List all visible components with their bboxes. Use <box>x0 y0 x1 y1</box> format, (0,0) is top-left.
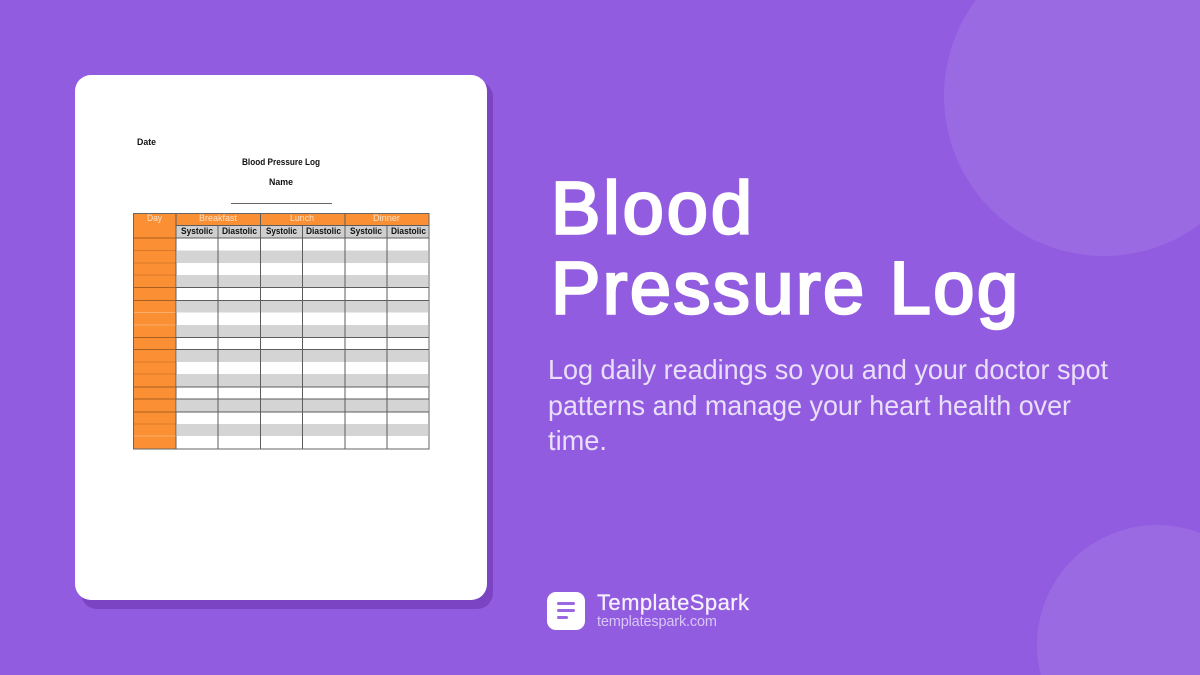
Day column <box>133 213 176 449</box>
description: Log daily readings so you and your doctor spot <box>548 354 1108 385</box>
systolic and diastolic labels: Diastolic <box>391 226 426 237</box>
log form header text <box>137 137 332 204</box>
systolic and diastolic labels: Diastolic <box>306 226 341 237</box>
log form header text: Blood Pressure Log <box>242 157 320 168</box>
systolic and diastolic labels <box>181 226 426 237</box>
log form header text: Name <box>269 177 293 188</box>
title: Pressure Log <box>551 246 1018 330</box>
shaded rows <box>177 250 428 436</box>
description: patterns and manage your heart health over <box>548 390 1071 421</box>
systolic and diastolic labels: Systolic <box>350 226 382 237</box>
meal header row <box>176 213 429 226</box>
brand logo icon <box>547 592 585 630</box>
systolic and diastolic header row <box>176 226 429 238</box>
brand name and URL: TemplateSpark <box>597 590 750 615</box>
title <box>551 166 1018 330</box>
blood pressure table <box>133 213 429 449</box>
table heading labels <box>147 213 400 224</box>
brand name and URL: templatespark.com <box>597 614 717 630</box>
table heading labels: Lunch <box>290 213 314 224</box>
description: time. <box>548 425 607 456</box>
systolic and diastolic labels: Systolic <box>266 226 297 237</box>
table heading labels: Breakfast <box>199 213 237 224</box>
systolic and diastolic labels: Diastolic <box>222 226 257 237</box>
brand name and URL <box>597 590 750 630</box>
log form header text: Date <box>137 137 156 148</box>
description <box>548 354 1108 456</box>
systolic and diastolic labels: Systolic <box>181 226 213 237</box>
title: Blood <box>551 166 752 250</box>
table heading labels: Day <box>147 213 162 224</box>
table heading labels: Dinner <box>373 213 400 224</box>
document card with shadow <box>75 75 493 609</box>
